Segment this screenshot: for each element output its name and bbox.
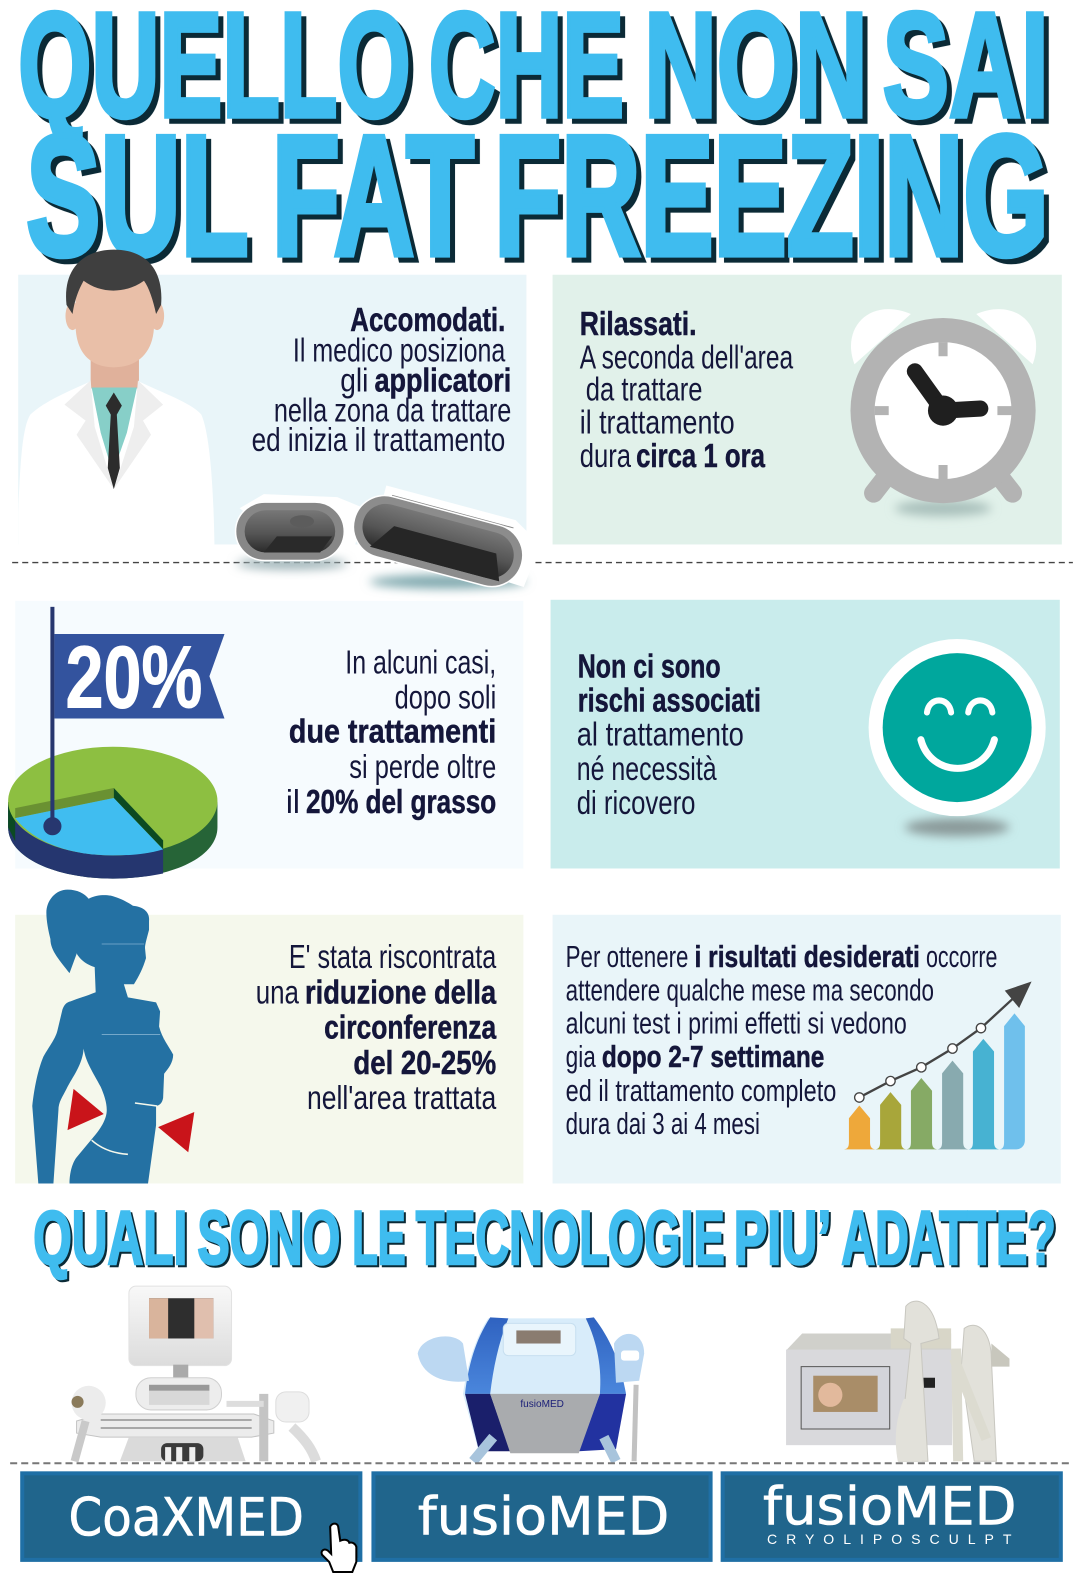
- icon: alarm clock: [850, 309, 1036, 516]
- panel: nessun rischio: [551, 600, 1060, 869]
- text: accomodati: nella zona da trattare: [274, 393, 511, 430]
- text: rischi: al trattamento: [577, 717, 744, 754]
- icon: hand cursor: [322, 1524, 356, 1572]
- panel: rilassati: [553, 275, 1062, 544]
- panel: risultati: [553, 915, 1061, 1184]
- text: due trattamenti: si perde oltre: [349, 749, 496, 786]
- flag: 20%: [65, 627, 202, 726]
- heading: tecnologie: LE: [352, 1196, 406, 1281]
- text: risultati: alcuni test i primi effetti si vedono: [566, 1008, 907, 1041]
- icon: applicators: [236, 480, 545, 597]
- divider 2: [10, 1462, 1072, 1464]
- device: fusiomed: fusioMED: [520, 1399, 564, 1410]
- text: riduzione: riduzione della: [305, 974, 497, 1011]
- logo box: coax med: CoaXMED: [69, 1488, 304, 1549]
- heading: tecnologie: QUALI: [33, 1196, 187, 1281]
- text: risultati: [566, 941, 997, 1141]
- text: risultati: attendere qualche mese ma secondo: [566, 974, 934, 1007]
- logo box: fusiomed: fusioMED: [418, 1487, 669, 1548]
- title: SUL: [26, 101, 249, 292]
- text: risultati: dopo 2-7 settimane: [602, 1041, 824, 1074]
- text: rilassati: da trattare: [586, 372, 703, 409]
- text: risultati: dura dai 3 ai 4 mesi: [566, 1108, 760, 1141]
- text: due trattamenti: due trattamenti: [289, 714, 496, 751]
- text: rischi: [577, 648, 761, 822]
- text: accomodati: ed inizia il trattamento: [252, 422, 505, 459]
- chart: growth bars with arrow: [844, 982, 1032, 1149]
- text: due trattamenti: In alcuni casi,: [345, 644, 496, 681]
- text: rilassati: circa 1 ora: [636, 438, 765, 475]
- panel: 20 percent: [8, 601, 523, 879]
- text: risultati: i risultati desiderati: [694, 941, 920, 974]
- text: due trattamenti: [286, 644, 496, 821]
- heading: tecnologie: SONO: [197, 1196, 340, 1281]
- text: risultati: Per ottenere: [566, 941, 688, 974]
- panel: circonferenza: [15, 890, 523, 1184]
- logo box: fusiomed cryoliposculpt: CRYOLIPOSCULPT: [767, 1531, 1012, 1547]
- device: fusiomed: [418, 1317, 644, 1461]
- text: riduzione: una: [256, 974, 299, 1011]
- device: coax med: [72, 1286, 316, 1461]
- text: riduzione: circonferenza: [324, 1010, 497, 1047]
- heading: tecnologie: TECNOLOGIE: [416, 1196, 725, 1281]
- title: FAT: [272, 101, 474, 292]
- text: accomodati: applicatori: [374, 362, 511, 399]
- text: rilassati: il trattamento: [580, 405, 735, 442]
- text: rischi: di ricovero: [577, 785, 695, 822]
- text: riduzione: nell'area trattata: [307, 1080, 497, 1117]
- text: risultati: ed il trattamento completo: [566, 1075, 836, 1108]
- text: accomodati: gli: [340, 362, 368, 399]
- chart: pie with flag: [8, 607, 225, 879]
- logo box: fusiomed cryoliposculpt: [723, 1473, 1061, 1560]
- text: accomodati: Accomodati.: [350, 302, 505, 339]
- arrow: right: [158, 1112, 194, 1152]
- text: rilassati: Rilassati.: [580, 306, 696, 343]
- text: due trattamenti: il: [286, 784, 300, 821]
- panel: accomodati: [18, 250, 526, 544]
- text: rilassati: A seconda dell'area: [580, 339, 793, 376]
- logo box: fusiomed cryoliposculpt: fusioMED: [763, 1477, 1017, 1538]
- text: rischi: Non ci sono: [578, 648, 721, 685]
- text: riduzione: [256, 939, 497, 1117]
- text: accomodati: Il medico posiziona: [293, 332, 506, 369]
- icon: doctor: [18, 250, 214, 544]
- icon: smiley: [869, 639, 1046, 836]
- text: due trattamenti: 20% del grasso: [306, 784, 496, 821]
- logo box: coax med: [22, 1473, 360, 1560]
- logo box: fusiomed: [373, 1473, 711, 1560]
- heading: tecnologie: PIU’: [734, 1196, 831, 1281]
- text: risultati: gia: [566, 1041, 596, 1074]
- text: riduzione: del 20-25%: [353, 1045, 496, 1082]
- heading: tecnologie: [33, 1196, 1056, 1281]
- text: rischi: né necessità: [577, 751, 717, 788]
- text: accomodati: [252, 302, 511, 459]
- divider 1: [12, 562, 1073, 564]
- icon: woman silhouette: [32, 890, 194, 1184]
- text: due trattamenti: dopo soli: [395, 679, 496, 716]
- arrow: left: [68, 1089, 104, 1130]
- text: rilassati: [580, 306, 793, 475]
- text: rischi: rischi associati: [578, 683, 761, 720]
- text: risultati: occorre: [926, 941, 997, 974]
- title: [18, 0, 1049, 292]
- device: cryoliposculpt: [786, 1301, 1009, 1461]
- text: riduzione: E' stata riscontrata: [289, 939, 497, 976]
- text: rilassati: dura: [580, 438, 631, 475]
